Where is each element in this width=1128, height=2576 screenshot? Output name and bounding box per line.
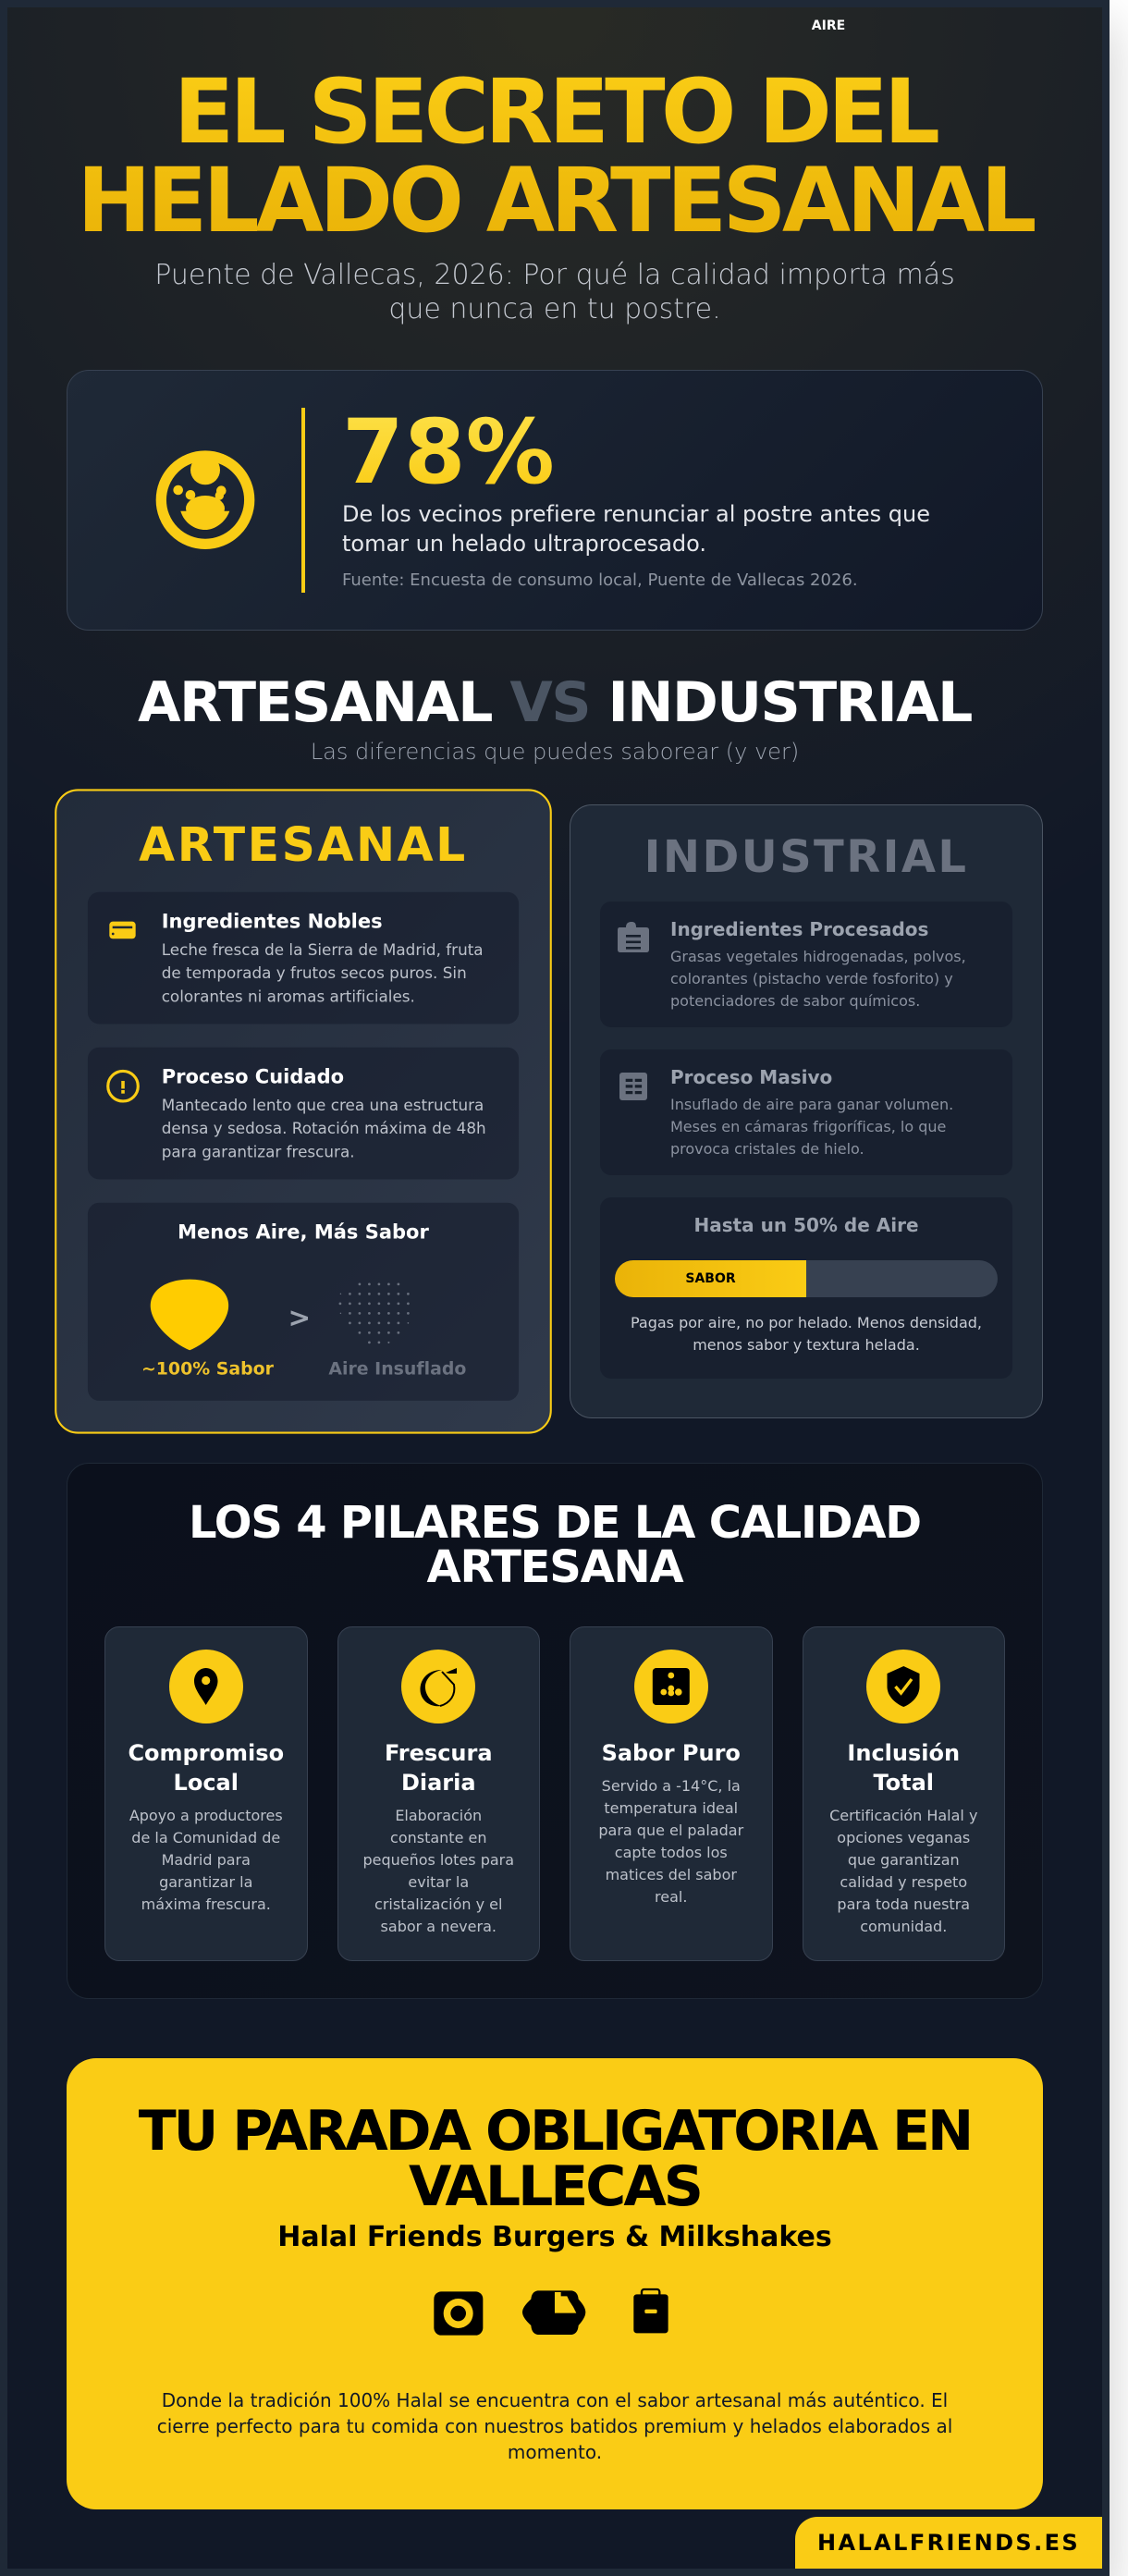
artesanal title: ARTESANAL — [139, 818, 468, 873]
pillar: sabor puro: Sabor Puro — [602, 1740, 741, 1766]
row: proceso masivo: provoca cristales de hielo. — [670, 1140, 864, 1158]
pillar: inclusión total: comunidad. — [860, 1918, 947, 1935]
pillar: compromiso local: Local — [174, 1770, 239, 1796]
icon: takeaway bag — [633, 2288, 668, 2334]
industrial title: INDUSTRIAL — [644, 831, 968, 883]
stat description — [342, 501, 930, 557]
pillar: inclusión total: para toda nuestra — [837, 1895, 970, 1913]
row: proceso masivo — [600, 1049, 1012, 1175]
panel: industrial — [570, 804, 1043, 1418]
panel: air content — [600, 1197, 1012, 1379]
stat number: 78% — [342, 400, 555, 504]
call to action body: cierre perfecto para tu comida con nuestros batidos premium y helados elaborados al — [157, 2415, 952, 2437]
pillars heading — [189, 1497, 921, 1593]
pillar: inclusión total: que garantizan — [848, 1851, 960, 1869]
pillar: sabor puro: Servido a -14°C, la — [602, 1777, 741, 1795]
pillar: compromiso local — [104, 1626, 307, 1961]
icon: milkshake blob — [522, 2290, 586, 2335]
panel: less air more flavour: ~100% Sabor — [141, 1359, 274, 1380]
row: ingredientes procesados: colorantes (pistacho verde fosforito) y — [670, 970, 953, 987]
website tab: HALALFRIENDS.ES — [817, 2530, 1080, 2556]
row: ingredientes nobles: de temporada y frutos secos puros. Sin — [162, 963, 467, 982]
stat description: De los vecinos prefiere renunciar al postre antes que — [342, 501, 930, 527]
panel: air content: menos sabor y textura helada. — [693, 1336, 920, 1354]
icons and drawings in artesanal card — [106, 921, 410, 1350]
pillar: inclusión total: Certificación Halal y — [829, 1807, 977, 1824]
icon: grid — [619, 1073, 647, 1100]
pillar: sabor puro: real. — [655, 1888, 687, 1906]
call to action heading — [139, 2099, 971, 2219]
row: proceso cuidado: Mantecado lento que crea una estructura — [162, 1096, 484, 1114]
icon: shield check — [888, 1666, 919, 1707]
pillar: inclusión total: Total — [873, 1770, 934, 1796]
pillar: compromiso local: Apoyo a productores — [129, 1807, 283, 1824]
row: ingredientes procesados: potenciadores de sabor químicos. — [670, 992, 920, 1010]
pillar: sabor puro: matices del sabor — [606, 1866, 737, 1883]
call to action heading: VALLECAS — [409, 2154, 701, 2219]
website tab — [795, 2517, 1102, 2569]
pillar: frescura diaria: Frescura — [385, 1740, 493, 1766]
row: ingredientes nobles: colorantes ni aromas artificiales. — [162, 987, 415, 1006]
subtitle: Puente de Vallecas, 2026: Por qué la calidad importa más — [154, 259, 955, 291]
title: EL SECRETO DEL — [174, 60, 936, 164]
row: ingredientes nobles: Leche fresca de la Sierra de Madrid, fruta — [162, 940, 484, 959]
panel: air content: Hasta un 50% de Aire — [693, 1214, 919, 1236]
pillars heading: ARTESANA — [427, 1541, 682, 1593]
heading: artesanal vs industrial: ARTESANAL VS INDUSTRIAL — [138, 670, 972, 735]
panel: less air more flavour: > — [288, 1302, 311, 1333]
row: proceso cuidado: para garantizar frescura. — [162, 1143, 355, 1161]
pillar: inclusión total: calidad y respeto — [840, 1873, 967, 1891]
pillar: compromiso local: Madrid para — [162, 1851, 251, 1869]
icon: fruit — [420, 1668, 457, 1707]
pillar: frescura diaria: constante en — [390, 1829, 486, 1846]
row: ingredientes nobles — [88, 892, 519, 1024]
row: proceso masivo: Meses en cámaras frigoríficas, lo que — [670, 1118, 946, 1135]
pillar: frescura diaria: pequeños lotes para — [362, 1851, 514, 1869]
panel: air content: Pagas por aire, no por helado. Menos densidad, — [631, 1314, 982, 1331]
pillar: sabor puro: para que el paladar — [598, 1822, 743, 1839]
pillar: frescura diaria: evitar la — [408, 1873, 469, 1891]
pillar: compromiso local: Compromiso — [128, 1740, 284, 1766]
row: ingredientes procesados: Ingredientes Procesados — [670, 918, 928, 940]
call to action body: Donde la tradición 100% Halal se encuentra con el sabor artesanal más auténtico. El — [162, 2389, 948, 2411]
pillar: frescura diaria: Elaboración — [395, 1807, 482, 1824]
panel: less air more flavour: Aire Insuflado — [328, 1359, 466, 1380]
pillar: frescura diaria: sabor a nevera. — [381, 1918, 497, 1935]
divider — [301, 408, 305, 593]
row: ingredientes procesados: Grasas vegetales hidrogenadas, polvos, — [670, 948, 966, 965]
row: proceso cuidado: Proceso Cuidado — [162, 1065, 344, 1088]
panel: artesanal — [55, 789, 552, 1434]
panel: key statistic — [67, 370, 1043, 631]
label: AIRE: AIRE — [812, 18, 845, 33]
row: proceso masivo: Proceso Masivo — [670, 1066, 832, 1088]
pillar: compromiso local: garantizar la — [159, 1873, 252, 1891]
icon: burger box — [434, 2291, 483, 2336]
icon: map pin — [194, 1668, 218, 1705]
call to action body: momento. — [508, 2441, 602, 2463]
stat description: tomar un helado ultraprocesado. — [342, 531, 706, 557]
pillar: frescura diaria — [337, 1626, 540, 1961]
icon: clipboard — [618, 922, 649, 952]
pillar: sabor puro: capte todos los — [615, 1844, 728, 1861]
icon: ice cream bowl in ring — [155, 450, 255, 549]
call to action body — [157, 2389, 952, 2463]
row: ingredientes procesados — [600, 902, 1012, 1027]
stat source: Fuente: Encuesta de consumo local, Puente de Vallecas 2026. — [342, 570, 858, 590]
pillar: inclusión total — [803, 1626, 1005, 1961]
call to action heading: TU PARADA OBLIGATORIA EN — [139, 2099, 971, 2164]
pillar: sabor puro: temperatura ideal — [604, 1799, 738, 1817]
pillars heading: LOS 4 PILARES DE LA CALIDAD — [189, 1497, 921, 1549]
pillar: compromiso local: máxima frescura. — [141, 1895, 271, 1913]
comparison subtitle: Las diferencias que puedes saborear (y ver) — [311, 739, 799, 765]
row: ingredientes nobles: Ingredientes Nobles — [162, 910, 383, 933]
pillar: inclusión total: opciones veganas — [837, 1829, 970, 1846]
subtitle: que nunca en tu postre. — [388, 293, 721, 325]
row: proceso cuidado: densa y sedosa. Rotación máxima de 48h — [162, 1119, 486, 1137]
panel: less air more flavour — [88, 1203, 519, 1401]
icon: flavour box — [653, 1668, 690, 1705]
pillar: frescura diaria: cristalización y el — [374, 1895, 502, 1913]
panel: less air more flavour: Menos Aire, Más Sabor — [178, 1221, 429, 1244]
pillar: compromiso local: de la Comunidad de — [131, 1829, 280, 1846]
title: HELADO ARTESANAL — [77, 149, 1033, 252]
pillar: sabor puro — [570, 1626, 773, 1961]
row: proceso cuidado — [88, 1048, 519, 1180]
pillar: inclusión total: Inclusión — [847, 1740, 960, 1766]
panel: air content: SABOR — [685, 1271, 736, 1286]
title — [7, 67, 1102, 245]
panel: four pillars — [67, 1463, 1043, 1999]
subtitle — [154, 259, 955, 325]
panel: call to action — [67, 2058, 1043, 2509]
pillar: frescura diaria: Diaria — [401, 1770, 476, 1796]
brand name: Halal Friends Burgers & Milkshakes — [277, 2221, 832, 2253]
row: proceso masivo: Insuflado de aire para ganar volumen. — [670, 1096, 953, 1113]
